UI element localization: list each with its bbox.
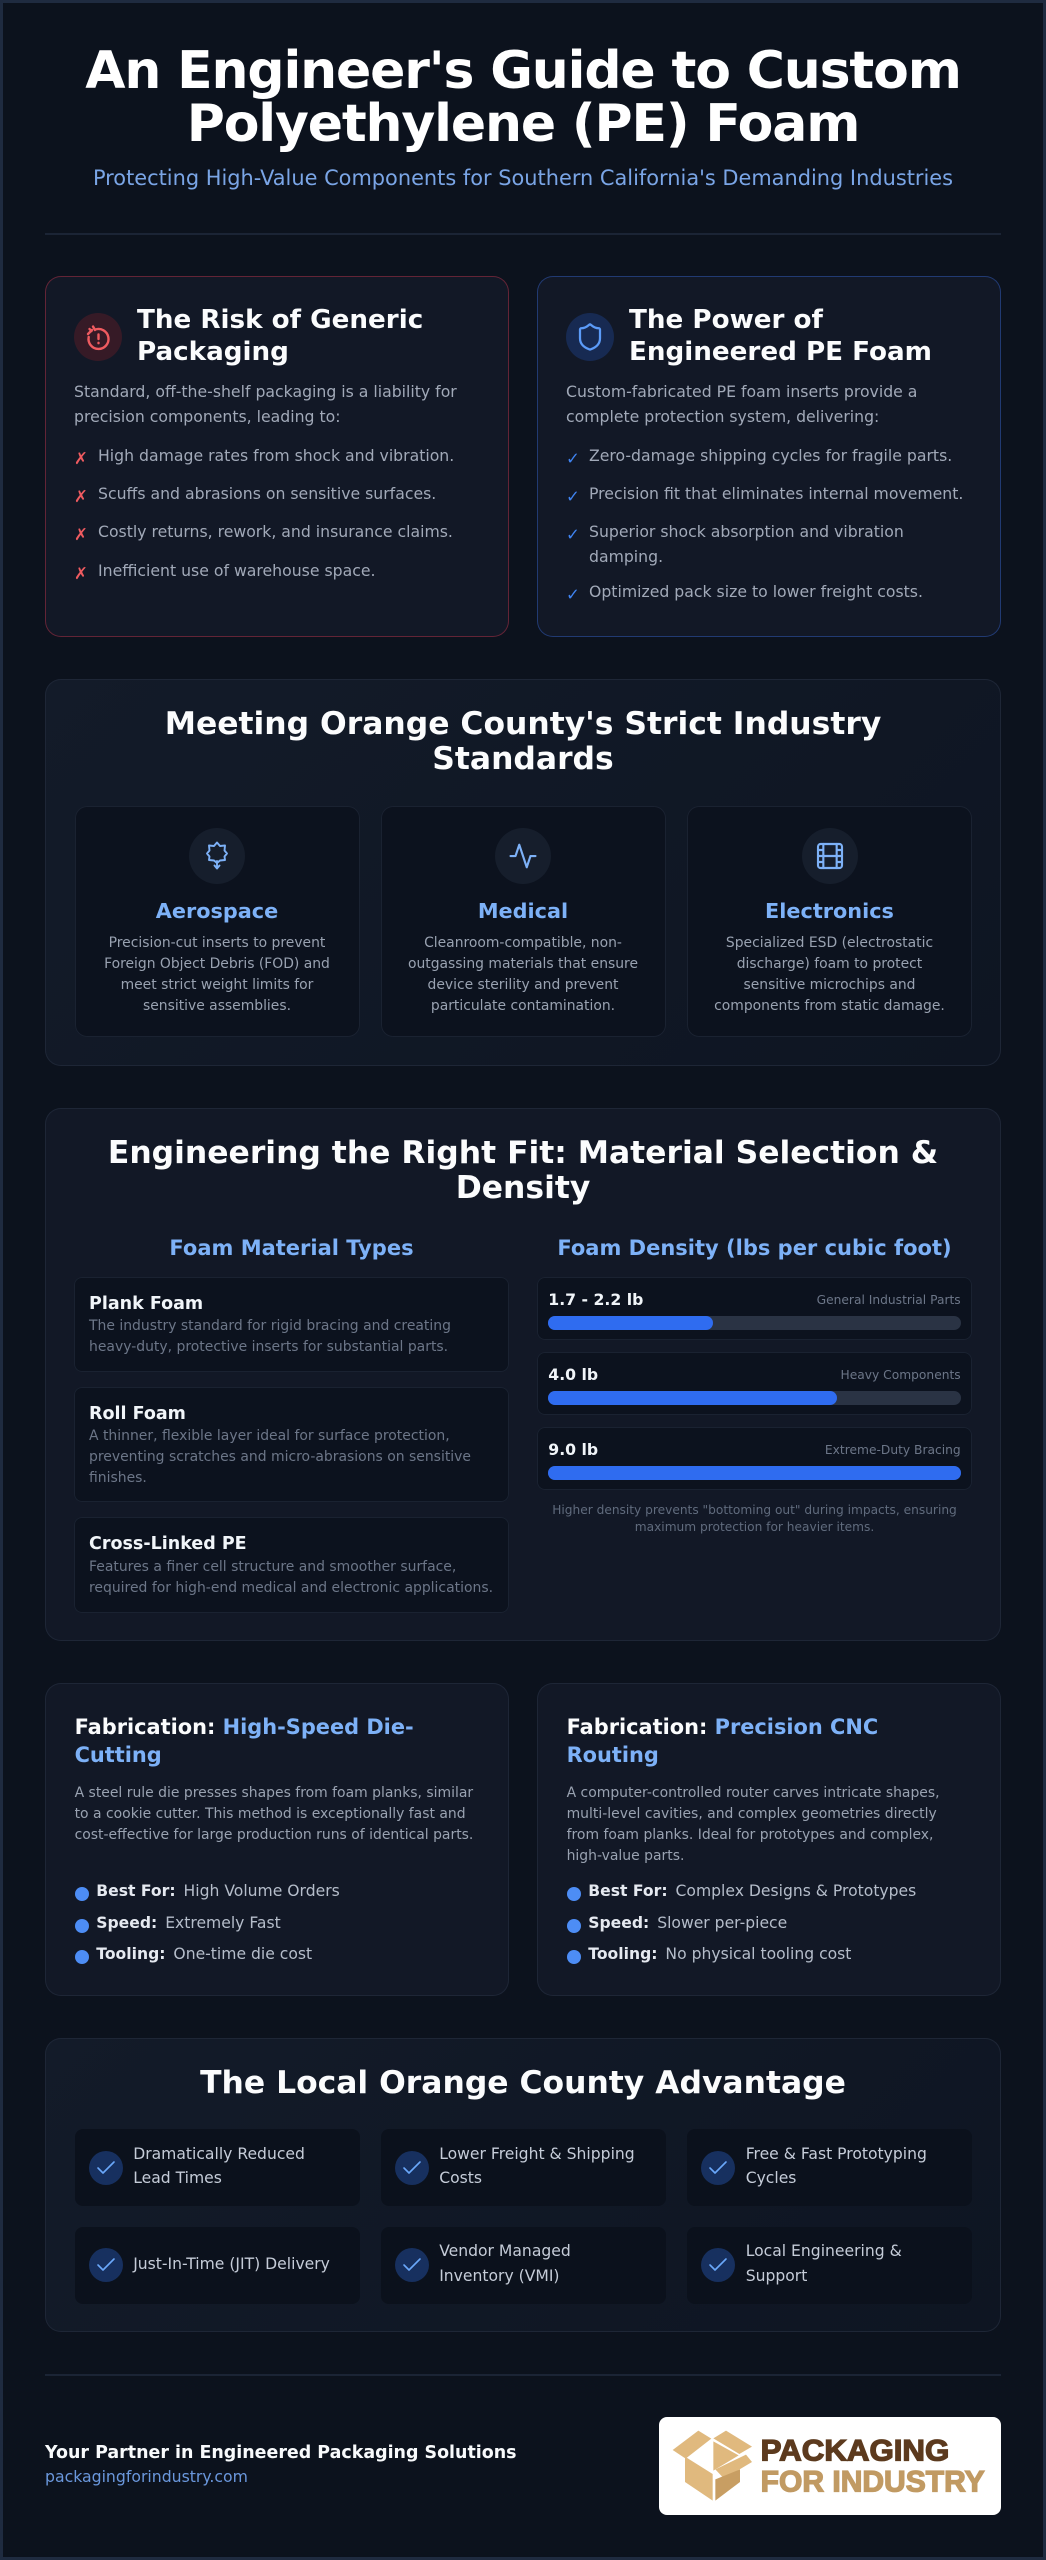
text: CNC routing (566, 1784, 940, 1864)
card: aerospace (74, 806, 360, 1037)
item: JIT delivery (74, 2227, 360, 2304)
note: density: maximum protection for heavier items. (635, 1520, 874, 1534)
heading: the power: Engineered PE Foam (629, 337, 932, 367)
text: aerospace (104, 934, 330, 1014)
text: electronics: discharge) foam to protect (737, 956, 922, 972)
text: CNC routing: high-value parts. (567, 1848, 684, 1864)
value: 9.0 lb (548, 1440, 598, 1459)
list: risks (74, 446, 454, 583)
heading: foam density: Foam Density (lbs per cubic foot) (557, 1236, 952, 1260)
item: prototyping (687, 2129, 972, 2206)
logo: packaging for industry (659, 2417, 1001, 2515)
benefit item: ✓ (566, 585, 580, 604)
text: die-cutting: A steel rule die presses shapes from foam planks, similar (75, 1784, 473, 1800)
text (746, 2242, 902, 2285)
name: Cross-Linked PE (89, 1534, 247, 1554)
text: medical (408, 934, 638, 1014)
heading: right fit: Engineering the Right Fit: Material Selection & (108, 1135, 938, 1171)
panel: CNC routing (537, 1683, 1001, 1996)
description (89, 1318, 451, 1355)
heading: CNC routing (567, 1714, 878, 1767)
spec: tooling: Tooling: One-time die cost (96, 1945, 312, 1963)
spec: tooling: Tooling: No physical tooling cost (588, 1945, 851, 1963)
icon: check (88, 2248, 122, 2282)
name: Plank Foam (89, 1294, 203, 1314)
text: Cycles (746, 2169, 796, 2187)
description (89, 1428, 471, 1486)
benefit item: Zero-damage shipping cycles for fragile parts. (589, 446, 952, 465)
text (133, 2145, 305, 2187)
text: Vendor Managed (439, 2242, 571, 2260)
benefit item: Optimized pack size to lower freight costs. (589, 582, 923, 601)
icon: electronics film (802, 828, 858, 884)
spec: speed: Speed: Extremely Fast (96, 1914, 281, 1932)
risk item: ✗ (74, 564, 88, 583)
heading: die-cutting: Fabrication: High-Speed Die- (75, 1714, 414, 1738)
item: VMI (380, 2227, 666, 2304)
item: local engineering (687, 2227, 972, 2304)
icon: shield (566, 312, 614, 360)
use: General Industrial Parts (817, 1293, 961, 1307)
text: die-cutting: to a cookie cutter. This method is exceptionally fast and (75, 1806, 466, 1822)
text: CNC routing: multi-level cavities, and complex geometries directly (567, 1806, 937, 1822)
title: Polyethylene (PE) Foam (187, 94, 859, 154)
icon: timer alert (74, 312, 122, 360)
description (89, 1559, 493, 1596)
text: die-cutting: cost-effective for large production runs of identical parts. (75, 1826, 473, 1842)
text: Inventory (VMI) (439, 2267, 560, 2285)
label: aerospace: Aerospace (156, 899, 278, 923)
risk item: Costly returns, rework, and insurance claims. (98, 522, 453, 541)
description: finishes. (89, 1470, 147, 1486)
text: medical: device sterility and prevent (428, 976, 618, 992)
card: medical (380, 806, 666, 1037)
text (746, 2145, 927, 2187)
text: power intro (566, 382, 917, 426)
panel: power of engineered foam (537, 276, 1001, 637)
note: density: Higher density prevents "bottoming out" during impacts, ensuring (552, 1503, 957, 1517)
card: cross-linked PE (74, 1517, 509, 1613)
risk item: ✗ (74, 449, 88, 468)
panel: material selection and density (45, 1108, 1001, 1641)
logo: packaging for industry: PACKAGING (761, 2434, 949, 2467)
benefit item: Superior shock absorption and vibration (589, 522, 904, 541)
heading: industry standards: Standards (432, 741, 614, 777)
description: heavy-duty, protective inserts for substantial parts. (89, 1339, 448, 1355)
text: risk intro: precision components, leading to: (74, 407, 341, 426)
risk item: ✗ (74, 487, 88, 506)
text: power intro: Custom-fabricated PE foam inserts provide a (566, 382, 917, 401)
text: Costs (439, 2169, 482, 2187)
heading: the risk: Packaging (137, 337, 289, 367)
heading: industry standards: Meeting Orange County's Strict Industry (165, 706, 881, 742)
title (85, 41, 961, 154)
heading: die-cutting (75, 1714, 414, 1767)
benefit item: damping. (589, 547, 663, 566)
spec: best for: Best For: High Volume Orders (96, 1882, 340, 1900)
panel: industry standards (45, 679, 1001, 1066)
value: 1.7 - 2.2 lb (548, 1290, 643, 1309)
benefit item (566, 522, 904, 566)
description: preventing scratches and micro-abrasions on sensitive (89, 1449, 471, 1465)
text: aerospace: meet strict weight limits for (121, 976, 313, 992)
card: roll foam (74, 1387, 509, 1502)
benefit item: ✓ (566, 487, 580, 506)
description: required for high-end medical and electronic applications. (89, 1580, 493, 1596)
risk item: High damage rates from shock and vibration. (98, 446, 454, 465)
heading: right fit: Density (456, 1170, 590, 1206)
text: die-cutting (74, 1784, 474, 1842)
text: Dramatically Reduced (133, 2145, 305, 2163)
bar (548, 1391, 961, 1405)
text: risk intro: Standard, off-the-shelf packaging is a liability for (74, 382, 457, 401)
text: Support (746, 2267, 807, 2285)
icon: check (394, 2248, 428, 2282)
description: The industry standard for rigid bracing and creating (89, 1318, 451, 1334)
bar (548, 1316, 961, 1330)
note: density (552, 1503, 957, 1534)
icon: check (88, 2151, 122, 2185)
bar (548, 1466, 961, 1480)
list: benefits (566, 446, 963, 604)
density bar: 9.0 lb (537, 1427, 972, 1490)
use: Heavy Components (841, 1368, 961, 1382)
heading: CNC routing: Routing (567, 1743, 659, 1767)
description: A thinner, flexible layer ideal for surface protection, (89, 1428, 450, 1444)
text: Local Engineering & (746, 2242, 902, 2260)
text (439, 2145, 635, 2187)
subtitle: Protecting High-Value Components for Southern California's Demanding Industries (93, 166, 953, 190)
card: electronics (687, 806, 972, 1037)
risk item: ✗ (74, 525, 88, 544)
heading: die-cutting: Cutting (75, 1743, 162, 1767)
spec: best for: Best For: Complex Designs & Prototypes (588, 1882, 916, 1900)
icon: check (701, 2151, 735, 2185)
icon: check (394, 2151, 428, 2185)
value: 4.0 lb (548, 1365, 598, 1384)
heading: local advantage: The Local Orange County Advantage (200, 2065, 846, 2101)
heading: industry standards (165, 706, 881, 777)
text: aerospace: sensitive assemblies. (143, 998, 291, 1014)
text: medical: Cleanroom-compatible, non- (424, 934, 622, 950)
text: medical: outgassing materials that ensure (408, 956, 638, 972)
footer link: packagingforindustry.com (45, 2467, 248, 2486)
text: risk intro (74, 382, 457, 426)
description: Features a finer cell structure and smoother surface, (89, 1559, 456, 1575)
name: Roll Foam (89, 1404, 186, 1424)
text: electronics (714, 934, 945, 1014)
title: An Engineer's Guide to Custom (85, 41, 961, 101)
text: Lead Times (133, 2169, 222, 2187)
panel: die-cutting (45, 1683, 509, 1996)
text: Lower Freight & Shipping (439, 2145, 635, 2163)
item: lead times (74, 2129, 360, 2206)
text: electronics: Specialized ESD (electrostatic (726, 934, 933, 950)
heading: the power: The Power of (629, 305, 823, 335)
heading: CNC routing: Fabrication: Precision CNC (567, 1714, 878, 1738)
footer tagline: Your Partner in Engineered Packaging Solutions (45, 2443, 517, 2463)
text: CNC routing: from foam planks. Ideal for prototypes and complex, (567, 1826, 933, 1842)
risk item: Scuffs and abrasions on sensitive surfaces. (98, 484, 436, 503)
text (439, 2242, 571, 2285)
benefit item: ✓ (566, 449, 580, 468)
density bar: 1.7 - 2.2 lb (537, 1277, 972, 1340)
heading: the risk: The Risk of Generic (137, 305, 423, 335)
text: aerospace: Precision-cut inserts to prevent (109, 934, 325, 950)
heading: the power (629, 305, 932, 367)
icon: aerospace (189, 828, 245, 884)
heading: foam material types: Foam Material Types (169, 1236, 414, 1260)
item: freight (380, 2129, 666, 2206)
text: power intro: complete protection system, delivering: (566, 407, 879, 426)
label: electronics: Electronics (765, 899, 894, 923)
text: electronics: components from static damage. (714, 998, 945, 1014)
text: Free & Fast Prototyping (746, 2145, 927, 2163)
icon: check (701, 2248, 735, 2282)
use: Extreme-Duty Bracing (825, 1443, 961, 1457)
panel: local advantage (45, 2038, 1001, 2332)
text: Just-In-Time (JIT) Delivery (133, 2255, 330, 2273)
risk item: Inefficient use of warehouse space. (98, 561, 375, 580)
label: medical: Medical (478, 899, 568, 923)
logo: packaging for industry: FOR INDUSTRY (761, 2465, 985, 2498)
benefit item: Precision fit that eliminates internal movement. (589, 484, 963, 503)
text: medical: particulate contamination. (431, 998, 615, 1014)
heading: the risk (137, 305, 423, 367)
card: plank foam (74, 1277, 509, 1372)
text: aerospace: Foreign Object Debris (FOD) and (104, 956, 330, 972)
benefit item: ✓ (566, 525, 580, 544)
heading: right fit (108, 1135, 938, 1206)
spec: speed: Speed: Slower per-piece (588, 1914, 787, 1932)
text: CNC routing: A computer-controlled router carves intricate shapes, (567, 1784, 940, 1800)
icon: medical pulse (495, 828, 551, 884)
text: electronics: sensitive microchips and (743, 976, 916, 992)
panel: risk of generic packaging (45, 276, 509, 637)
density bar: 4.0 lb (537, 1352, 972, 1415)
